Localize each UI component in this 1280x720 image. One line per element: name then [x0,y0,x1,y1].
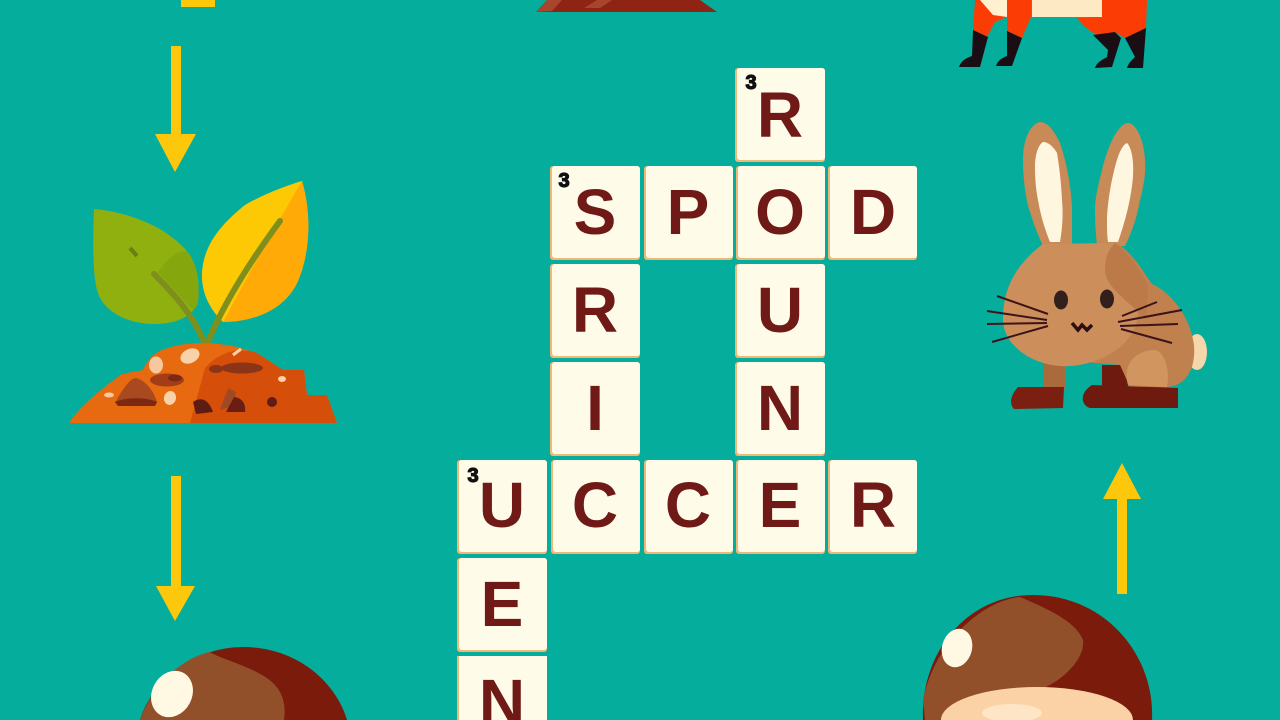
tile: E [457,558,547,652]
icon: mushroom cap, bottom left [140,647,347,720]
tail [1187,334,1207,370]
nose [1072,323,1092,330]
eyes [1054,290,1068,310]
icon: fox legs, top right [959,0,1147,68]
tile: U [457,460,547,554]
tile: N [457,656,547,720]
ears [1023,122,1072,246]
tile: C: C [665,469,711,541]
feet [1011,387,1064,409]
tile: S [550,166,640,260]
yellow leaf [202,181,308,322]
tile: P [644,166,733,260]
crossword grid [457,68,917,720]
tile: D [828,166,917,260]
front leg [1043,358,1065,390]
tile: R [550,264,640,358]
tile: S: S [574,176,616,248]
tile: D: D [850,176,896,248]
tile: C [551,460,640,554]
arrow: down to mushroom [156,476,195,621]
arrow: down to sprout [155,46,196,172]
soil mound [69,343,337,423]
body [1060,243,1194,387]
tile: R: R [850,469,896,541]
tile: O [736,166,825,260]
icon: rabbit [987,122,1207,409]
whiskers [987,296,1182,343]
tile: U: 3 [467,465,479,487]
arrow stub: top left [181,0,215,7]
tile: E: E [481,568,523,640]
tile: R [735,68,825,162]
tile: I: I [586,372,604,444]
tile: E [736,460,825,554]
tile: R: 3 [745,72,757,94]
arrow: up to rabbit [1103,463,1141,594]
tile: C [644,460,733,554]
tile: S: 3 [558,170,570,192]
tile: C: C [572,469,618,541]
tile: U: U [757,274,803,346]
tile: N [735,362,825,456]
back leg [1102,365,1128,389]
icon: soil mound, top centre [536,0,717,12]
tile: O: O [755,176,805,248]
tile: R [828,460,917,554]
tile: E: E [759,469,801,541]
icon: sprout in soil [69,181,337,423]
tile: N: N [757,372,803,444]
stems [154,221,280,342]
tile: R: R [757,79,803,151]
green leaf [93,209,199,324]
icon: mushroom, bottom right [923,595,1152,720]
tile: R: R [572,274,618,346]
tile: I [550,362,640,456]
tile: U: U [479,469,525,541]
head [1003,243,1138,366]
tile: U [735,264,825,358]
tile: P: P [667,176,709,248]
